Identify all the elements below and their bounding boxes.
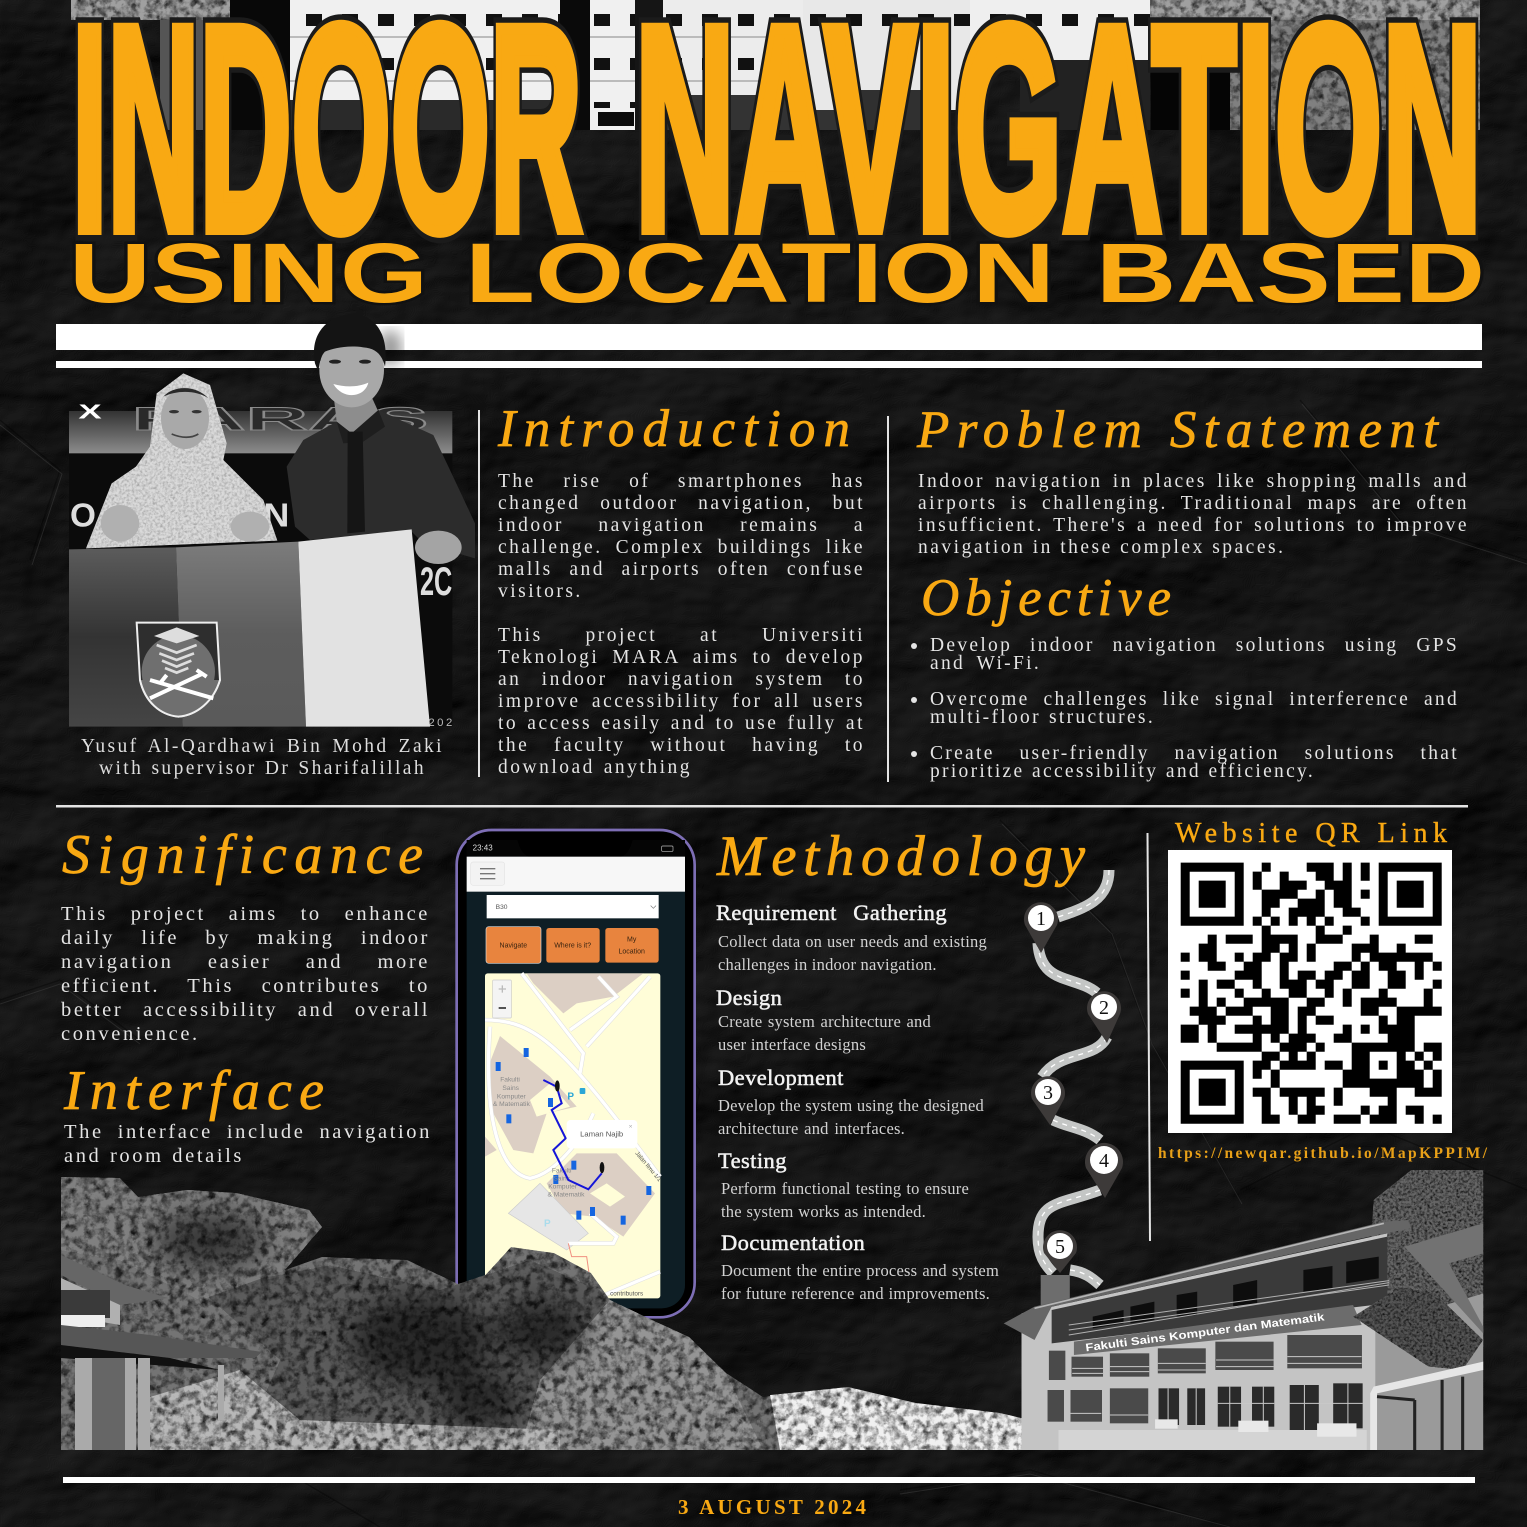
panel: significance text: navigation easier and more <box>61 951 430 973</box>
pin 3 <box>1031 1076 1065 1125</box>
objective 3 <box>911 743 1459 782</box>
map: contributors <box>610 1290 643 1297</box>
popup: × <box>629 1124 633 1131</box>
woman <box>86 373 277 548</box>
buttons: Location <box>618 948 645 955</box>
methodology step 3: Develop the system using the designed <box>718 1096 984 1115</box>
heading: Significance: Significance <box>62 824 423 886</box>
methodology step 5 <box>721 1230 999 1303</box>
foliage: far trees base <box>61 1177 1035 1450</box>
sign band: Fakulti Sains Komputer dan Matematik <box>1085 1311 1326 1354</box>
walls <box>1022 1233 1387 1450</box>
methodology step 1: Collect data on user needs and existing <box>718 932 987 951</box>
methodology step 5: for future reference and improvements. <box>721 1284 990 1303</box>
panel: interface text: The interface include navigation <box>64 1121 432 1143</box>
shadow masses <box>155 1212 585 1428</box>
heading: Objective: Objective <box>921 569 1171 627</box>
panel: significance text: efficient. This contributes to <box>61 975 430 997</box>
headings <box>62 400 1439 1122</box>
methodology step 3 <box>718 1065 984 1138</box>
methodology step 4: the system works as intended. <box>721 1202 926 1221</box>
flag <box>69 529 430 727</box>
pin 3: 3 <box>1043 1082 1053 1104</box>
house on left <box>61 1255 262 1450</box>
methodology step 4: Perform functional testing to ensure <box>721 1179 969 1198</box>
roadmap: winding road with numbered pins <box>1024 870 1123 1285</box>
map: P <box>567 1091 574 1102</box>
panel: significance text: convenience. <box>61 1023 200 1045</box>
QR code <box>1168 850 1452 1133</box>
methodology step 1 <box>716 900 987 974</box>
methodology step 5: Document the entire process and system <box>721 1261 999 1280</box>
methodology step 5: Documentation <box>721 1230 865 1255</box>
methodology step 2: Create system architecture and <box>718 1012 931 1031</box>
panel: significance text: This project aims to enhance <box>61 903 430 925</box>
panel: significance text <box>61 903 430 1045</box>
shadow beside man's head <box>378 330 402 366</box>
panel: objective list <box>911 635 1459 782</box>
pin 1 <box>1024 902 1058 953</box>
subtitle: USING LOCATION BASED: BASED <box>1096 226 1485 320</box>
map: Fakulti <box>500 1077 520 1084</box>
panel: significance text: better accessibility and overall <box>61 999 430 1021</box>
backdrop: N <box>263 498 289 535</box>
methodology step 2 <box>716 985 931 1054</box>
roof <box>1004 1220 1411 1340</box>
backdrop: O <box>70 498 96 535</box>
pin 5: 5 <box>1055 1236 1065 1258</box>
methodology step 2: user interface designs <box>718 1035 866 1054</box>
panel: introduction text: Teknologi MARA aims to develop <box>498 647 865 668</box>
building photo: Fakulti Sains Komputer dan Matematik <box>1004 1170 1483 1450</box>
icon: university shield crest <box>137 623 220 717</box>
buttons: My <box>627 937 637 944</box>
pin 2: 2 <box>1099 997 1109 1019</box>
backdrop: 202 <box>428 717 452 729</box>
methodology step 3: Development <box>718 1065 844 1090</box>
methodology step 4: Testing <box>718 1148 787 1173</box>
popup <box>567 1120 637 1148</box>
divider lines <box>56 410 1475 1483</box>
panel: problem statement text <box>918 471 1469 558</box>
phone body <box>457 830 695 1317</box>
objective 1: and Wi-Fi. <box>930 653 1041 674</box>
objective 2: Overcome challenges like signal interference and <box>930 689 1459 710</box>
map <box>485 973 662 1298</box>
road <box>1038 870 1109 1285</box>
phone screen: B30 <box>496 904 508 911</box>
panel: problem statement text: Indoor navigation in places like shopping malls and <box>918 471 1469 492</box>
popup: Laman Najib <box>580 1130 623 1139</box>
methodology step 2: Design <box>716 985 782 1010</box>
panel: introduction text: indoor navigation remains a <box>498 515 865 536</box>
panel: introduction text <box>498 471 865 778</box>
foliage: bright shrubs <box>770 1387 1035 1450</box>
panel: introduction text: the faculty without having to <box>498 735 865 756</box>
buttons <box>486 927 659 963</box>
phone screen <box>467 837 685 1308</box>
subtitle: USING LOCATION BASED: USING <box>69 226 428 320</box>
forest photo strip <box>61 1177 1035 1450</box>
methodology step 1: challenges in indoor navigation. <box>718 955 937 974</box>
panel: introduction text: This project at Universiti <box>498 625 865 646</box>
panel: introduction text: download anything <box>498 757 692 778</box>
foliage: dark middle trees <box>200 1260 620 1450</box>
panel: introduction text: improve accessibility for all users <box>498 691 865 712</box>
route line <box>543 1080 602 1189</box>
panel: introduction text: malls and airports often confuse <box>498 559 865 580</box>
photo strip: campus buildings behind title <box>71 0 1480 130</box>
heading: Methodology: Methodology <box>716 825 1086 888</box>
map: Komputer <box>548 1184 578 1191</box>
panel: problem statement text: insufficient. There's a need for solutions to improve <box>918 515 1469 536</box>
objective 3: prioritize accessibility and efficiency. <box>930 761 1315 782</box>
QR url: https://newqar.github.io/MapKPPIM/ <box>1158 1145 1488 1162</box>
panel: interface text: and room details <box>64 1145 244 1167</box>
phone screen: 23:43 <box>473 844 493 853</box>
panel: introduction text: an indoor navigation system to <box>498 669 865 690</box>
panel: introduction text: The rise of smartphones has <box>498 471 865 492</box>
methodology step 1: Requirement Gathering <box>716 900 947 925</box>
middle and lower windows <box>1048 1335 1362 1423</box>
heading: Interface: Interface <box>63 1060 324 1122</box>
date: 3 AUGUST 2024 <box>678 1495 866 1519</box>
base <box>1058 1430 1367 1450</box>
photo caption: Yusuf Al-Qardhawi Bin Mohd Zaki <box>81 736 444 757</box>
upper floor <box>1052 1237 1387 1343</box>
objective 1 <box>911 635 1459 674</box>
photo: student and supervisor with flag <box>69 314 475 729</box>
header rule bars <box>56 324 1482 368</box>
backdrop: X <box>78 401 103 423</box>
map: Komputer <box>497 1093 527 1100</box>
map: & Matematik <box>547 1192 585 1199</box>
map: Jalan Ilmu 1/1 <box>633 1151 662 1184</box>
subtitle: USING LOCATION BASED <box>69 226 1485 320</box>
man <box>287 314 475 564</box>
subtitle: USING LOCATION BASED: LOCATION <box>465 226 1055 320</box>
foliage: right hill <box>520 1300 763 1450</box>
heading: Website QR Link: Website QR Link <box>1175 818 1447 849</box>
chimney <box>1041 1275 1070 1305</box>
pin 4 <box>1085 1143 1123 1198</box>
photo caption: with supervisor Dr Sharifalillah <box>99 758 426 779</box>
panel: introduction text: changed outdoor navigation, but <box>498 493 865 514</box>
phone mockup with navigation map <box>457 830 695 1317</box>
map: & Matematik <box>493 1101 530 1108</box>
side wing and awning <box>1375 1293 1483 1450</box>
backdrop: 2C <box>420 560 452 604</box>
methodology step 4 <box>718 1148 969 1221</box>
panel: introduction text: visitors. <box>498 581 583 602</box>
foliage: left top trees lit <box>61 1177 322 1300</box>
pin 1: 1 <box>1036 908 1046 930</box>
heading: Introduction: Introduction <box>497 400 850 458</box>
pin 4: 4 <box>1099 1150 1109 1172</box>
panel: interface text <box>64 1121 432 1167</box>
pin 2 <box>1087 991 1121 1043</box>
objective 2 <box>911 689 1459 728</box>
backdrop: PARAS <box>132 401 428 437</box>
panel: problem statement text: navigation in these complex spaces. <box>918 537 1285 558</box>
buttons: Navigate <box>500 942 527 949</box>
pin 5 <box>1043 1230 1077 1273</box>
map: P <box>544 1219 551 1230</box>
map: Sains <box>553 1176 571 1183</box>
objective 2: multi-floor structures. <box>930 707 1155 728</box>
methodology step 3: architecture and interfaces. <box>718 1119 905 1138</box>
buttons: Where is it? <box>554 942 591 949</box>
panel: introduction text: challenge. Complex buildings like <box>498 537 865 558</box>
map: Sains <box>502 1085 520 1092</box>
map: Fakulti <box>552 1168 572 1175</box>
backdrop <box>69 401 452 729</box>
heading: Problem Statement: Problem Statement <box>916 401 1439 459</box>
photo caption <box>81 736 444 779</box>
objective 1: Develop indoor navigation solutions using GPS <box>930 635 1459 656</box>
panel: significance text: daily life by making indoor <box>61 927 430 949</box>
objective 3: Create user-friendly navigation solutions that <box>930 743 1459 764</box>
panel: introduction text: to access easily and to use fully at <box>498 713 865 734</box>
sign band <box>1074 1305 1362 1355</box>
panel: problem statement text: airports is challenging. Traditional maps are often <box>918 493 1469 514</box>
tree behind <box>1353 1170 1483 1367</box>
